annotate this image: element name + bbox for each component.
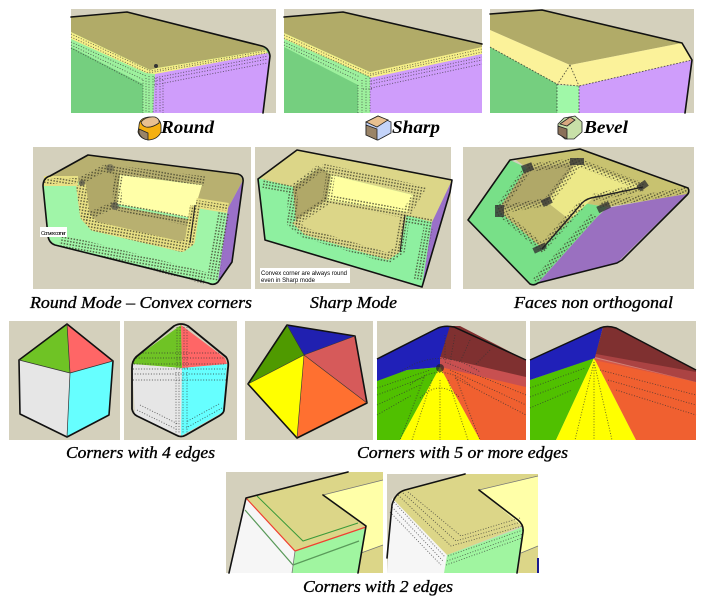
panel: four edge corner, plain: [9, 321, 120, 440]
panel: round mode sofa: [33, 147, 251, 289]
caption: Round: Round: [160, 117, 215, 137]
label: Convex corner: [40, 227, 67, 237]
panel: five edge corner, plain: [245, 321, 373, 440]
icon: round tool: [138, 117, 161, 140]
icon: sharp tool: [366, 116, 391, 140]
panel: non orthogonal faces: [463, 147, 694, 289]
panel: sharp corner close-up: [284, 9, 482, 113]
panel: round corner close-up: [71, 9, 276, 113]
icon: bevel tool: [558, 116, 582, 139]
panel: five edge corner, sharp: [530, 321, 696, 440]
caption: Corners with 2 edges: Corners with 2 edges: [303, 577, 453, 596]
caption: Faces non orthogonal: Faces non orthogonal: [513, 293, 673, 312]
caption: Sharp: Sharp: [392, 117, 440, 137]
panel: two edge corner, rounded: [387, 474, 539, 573]
panel: bevel corner close-up: [490, 9, 694, 113]
caption: Sharp Mode: Sharp Mode: [310, 293, 397, 312]
caption: Bevel: Bevel: [583, 117, 628, 137]
label: convex note: Convex corner are always round: [261, 271, 347, 277]
caption: Corners with 5 or more edges: Corners with 5 or more edges: [357, 443, 568, 462]
label: convex note: [260, 268, 350, 284]
caption: Round: [138, 117, 215, 140]
panel: five edge corner, round: [377, 321, 526, 440]
label: Convex corner: Convex corner: [41, 231, 66, 237]
label: convex note: even in Sharp mode: [261, 278, 316, 284]
panel: two edge corner, outlines: [226, 472, 383, 573]
panel: sharp mode sofa: [255, 147, 452, 289]
caption: Bevel: [558, 116, 628, 139]
caption: Sharp: [366, 116, 440, 140]
caption: Round Mode: Round Mode – Convex corners: [29, 293, 252, 312]
caption: Corners with 4 edges: Corners with 4 edges: [66, 443, 215, 462]
panel: four edge corner, rounded: [124, 321, 237, 440]
